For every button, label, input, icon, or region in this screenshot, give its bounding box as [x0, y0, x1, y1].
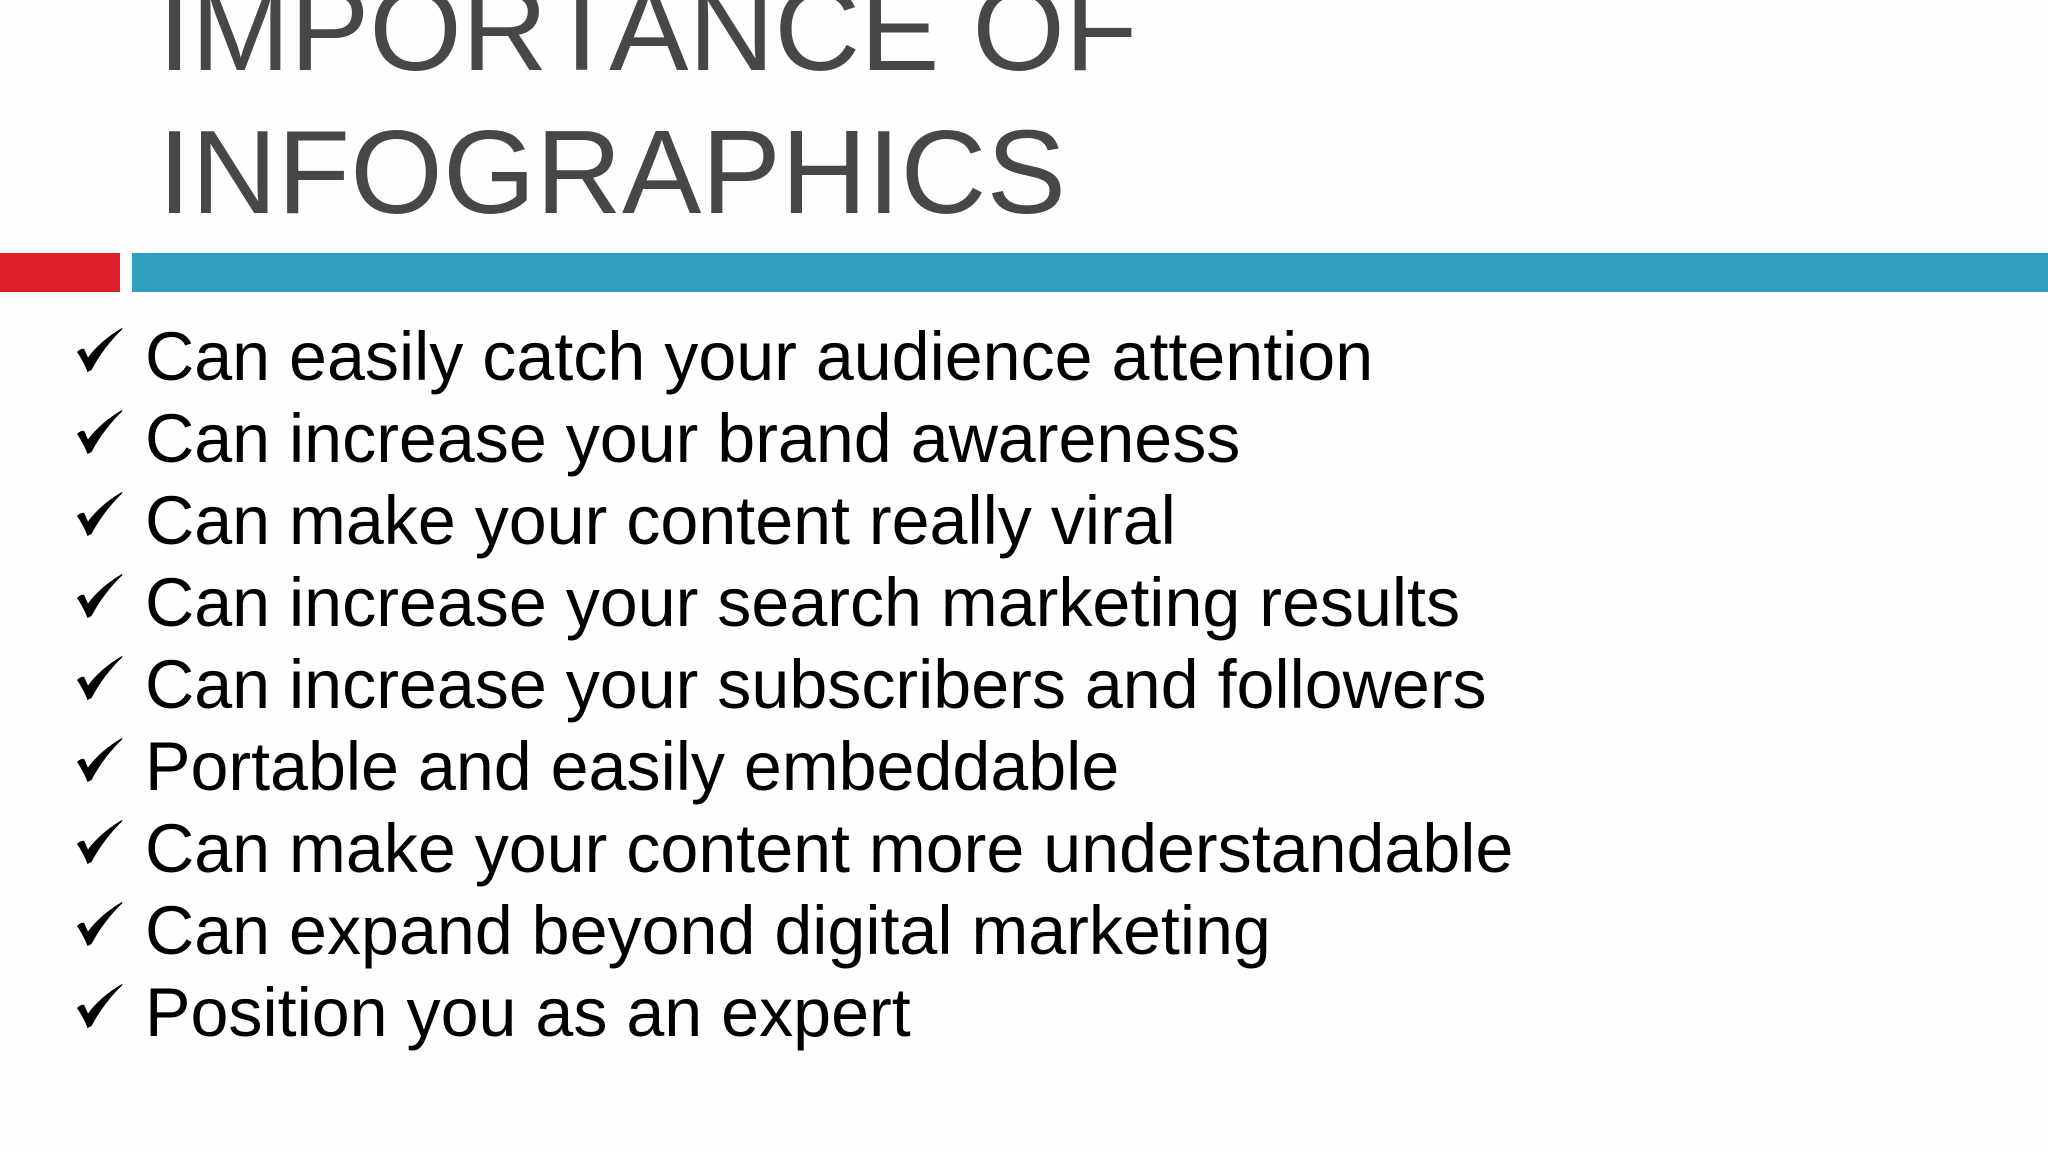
item 1: Can easily catch your audience attention — [145, 319, 1373, 395]
teal header bar — [132, 253, 2048, 292]
title line 2: INFOGRAPHICS — [158, 106, 1066, 239]
item 2: Can increase your brand awareness — [145, 401, 1240, 477]
title — [158, 0, 1137, 239]
item 5: Can increase your subscribers and followers — [145, 647, 1487, 723]
item 3: Can make your content really viral — [145, 483, 1176, 559]
red accent bar — [0, 253, 120, 292]
item 8: Can expand beyond digital marketing — [145, 893, 1271, 969]
item 7: Can make your content more understandable — [145, 811, 1513, 887]
checklist — [77, 319, 1513, 1051]
item 9: Position you as an expert — [145, 975, 911, 1051]
item 4: Can increase your search marketing results — [145, 565, 1460, 641]
item 6: Portable and easily embeddable — [145, 729, 1119, 805]
